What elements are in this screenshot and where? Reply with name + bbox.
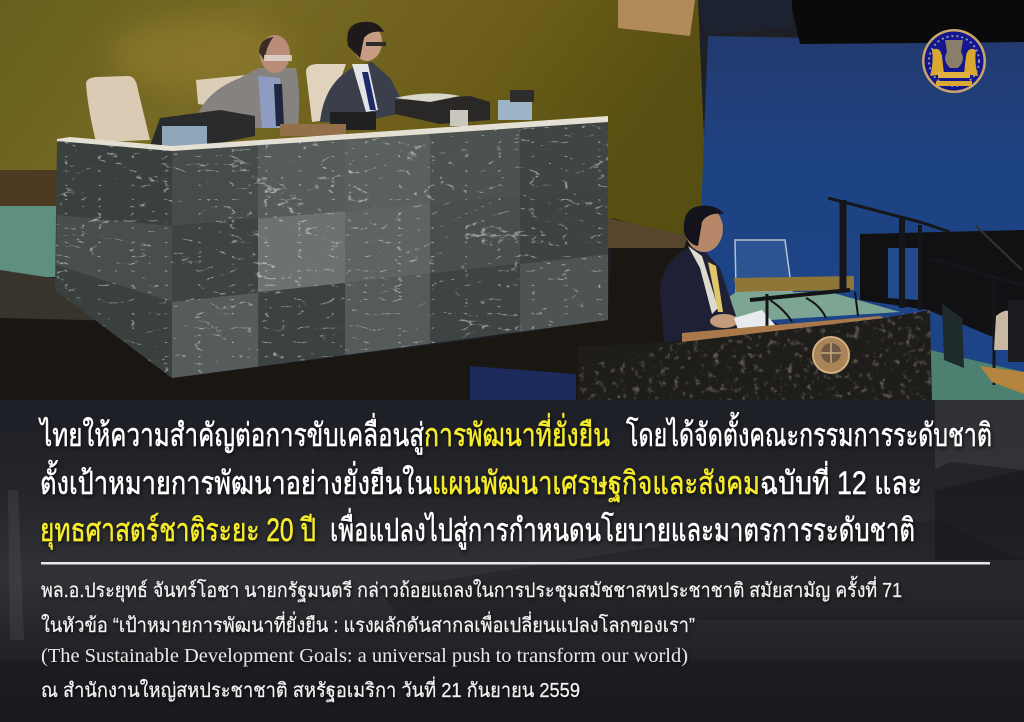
blue wall: [700, 36, 1024, 400]
dark ceiling fixture: [698, 0, 792, 36]
headline line 2: แผนพัฒนาเศรษฐกิจและสังคม: [432, 465, 760, 503]
desk front tiles: [172, 122, 608, 378]
chair middle: [196, 75, 246, 110]
panel ghost shapes: [935, 400, 1024, 470]
suit: [320, 62, 408, 122]
seal base: [938, 72, 970, 78]
desk wood right: [980, 366, 1024, 394]
shirt and tie: [258, 76, 284, 128]
marble veins: [55, 122, 610, 380]
headline line 2: [40, 460, 922, 503]
blue box under desk: [470, 366, 576, 400]
desk left side: [55, 140, 172, 378]
teal floor right: [930, 350, 1024, 400]
speaker papers: [734, 310, 776, 330]
headline text: [38, 412, 992, 550]
desk equipment: [150, 90, 534, 148]
railings right: [828, 198, 1024, 385]
chair right: [306, 64, 346, 122]
UN emblem: [813, 337, 849, 373]
desk top edge: [57, 116, 608, 151]
gold wall highlight: [110, 20, 290, 90]
headline line 2: ฉบับที่ 12 และ: [760, 461, 922, 501]
chair left: [86, 76, 150, 142]
person: speaker: [660, 206, 776, 342]
glass screen: [735, 240, 792, 292]
speaker hands: [710, 314, 738, 328]
divider rule: [41, 562, 990, 564]
caption line 4: ณ สำนักงานใหญ่สหประชาชาติ สหรัฐอเมริกา วันที่ 21 กันยายน 2559: [41, 676, 580, 702]
teal floor left: [0, 205, 70, 277]
microphones: [750, 290, 858, 400]
caption line 3: English title: (The Sustainable Development Goals: a universal push to transform our world): [41, 645, 688, 667]
wooden ledge: [606, 218, 688, 248]
dark stage base: [0, 218, 700, 400]
wood wall strip: [734, 276, 854, 292]
caption line 2: ในหัวข้อ “เป้าหมายการพัฒนาที่ยั่งยืน : แรงผลักดันสากลเพื่อเปลี่ยนแปลงโลกของเรา”: [41, 611, 695, 637]
stage step left: [0, 270, 172, 322]
text panel background: [0, 400, 1024, 722]
speaker head: [685, 206, 723, 252]
headline line 1: [38, 412, 992, 455]
booth blue panel: [888, 248, 920, 300]
screen right: [1008, 300, 1024, 362]
shirt and tie: [352, 64, 378, 112]
speaker shirt and tie: [688, 246, 718, 314]
headline line 1: การพัฒนาที่ยั่งยืน: [424, 413, 610, 453]
monitor right: [942, 304, 964, 368]
wood strip left: [0, 170, 60, 206]
seal lions: [930, 49, 944, 76]
person: seated official right: [320, 22, 408, 122]
seal outer ornament ring: [929, 36, 979, 86]
head: [260, 35, 290, 73]
marble desk: [55, 116, 610, 380]
chair right booth: [994, 311, 1010, 350]
headline line 3: [40, 508, 915, 550]
podium top: [682, 316, 884, 342]
head: [352, 23, 382, 61]
gold wall: [0, 0, 708, 240]
ceiling fixture: [618, 0, 695, 36]
headline line 3: ยุทธศาสตร์ชาติระยะ 20 ปี: [40, 512, 316, 550]
headline line 2: ตั้งเป้าหมายการพัฒนาอย่างยั่งยืนใน: [40, 460, 432, 501]
teal floor behind podium: [690, 292, 900, 325]
speaker suit: [660, 246, 736, 342]
speaker podium: [578, 310, 932, 400]
caption text: [41, 576, 902, 702]
suit: [196, 68, 299, 128]
photo background: General Assembly hall: [0, 0, 1024, 400]
dark booth right: [860, 230, 1024, 345]
seal urn: [945, 40, 963, 68]
caption line 1: พล.อ.ประยุทธ์ จันทร์โอชา นายกรัฐมนตรี กล่าวถ้อยแถลงในการประชุมสมัชชาสหประชาชาติ สมัยสามัญ ครั้งที่ 71: [41, 576, 902, 603]
black ceiling band: [790, 0, 1024, 44]
emblem: Thai government seal: [922, 29, 986, 93]
person: seated official left: [196, 35, 299, 128]
headline line 1: ไทยให้ความสำคัญต่อการขับเคลื่อนสู่: [38, 413, 424, 455]
podium marble front: [578, 310, 932, 400]
